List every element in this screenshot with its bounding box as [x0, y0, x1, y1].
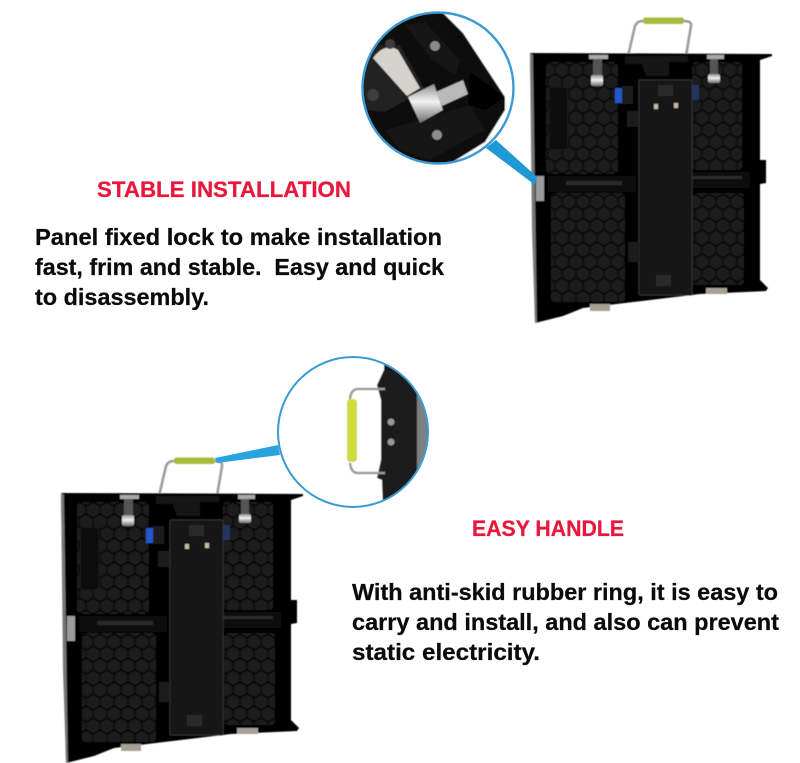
- text block: easy handle: carry and install, and also can prevent: [352, 609, 779, 635]
- text block: easy handle: [352, 579, 779, 665]
- heading: stable installation: STABLE INSTALLATION: [97, 177, 351, 202]
- text block: stable installation: [35, 224, 444, 310]
- side lock plate: [536, 176, 544, 201]
- text block: stable installation: fast, frim and stable. Easy and quick: [35, 254, 444, 280]
- bottom latches: [590, 288, 727, 311]
- silver cylinder: [408, 84, 443, 123]
- text block: stable installation: Panel fixed lock to make installation: [35, 224, 442, 250]
- spine vents and ports: [654, 85, 678, 286]
- frame edge: [376, 364, 418, 500]
- cross bars: [548, 172, 750, 192]
- callout circle: handle close-up: [275, 355, 431, 511]
- cabinet body: [530, 53, 772, 323]
- product photo: LED panel rear, bottom: [61, 458, 303, 763]
- product photo: LED panel rear, top: [530, 18, 772, 323]
- honeycomb panels: [546, 62, 744, 302]
- text block: stable installation: to disassembly.: [35, 284, 209, 310]
- dark mechanism: [367, 14, 506, 162]
- callout wedge: panel lock: [486, 140, 537, 185]
- screws: [430, 41, 440, 51]
- left frame edge: [530, 53, 537, 323]
- lever: [373, 47, 420, 96]
- side grip: [549, 87, 568, 150]
- wire handle: [350, 389, 385, 473]
- rubber grip: [347, 399, 357, 462]
- carrying handle: [628, 18, 691, 56]
- lock fitting left: [589, 55, 608, 86]
- blue connectors: [615, 85, 699, 262]
- text block: easy handle: static electricity.: [352, 639, 540, 665]
- heading: easy handle: EASY HANDLE: [472, 516, 624, 541]
- callout circle: panel lock close-up: [360, 10, 516, 170]
- callout wedge: handle: [215, 445, 280, 463]
- lock fitting right: [707, 55, 724, 83]
- text block: easy handle: With anti-skid rubber ring, it is easy to: [352, 579, 778, 605]
- centre spine: [639, 80, 692, 295]
- spine top bracket: [625, 56, 688, 76]
